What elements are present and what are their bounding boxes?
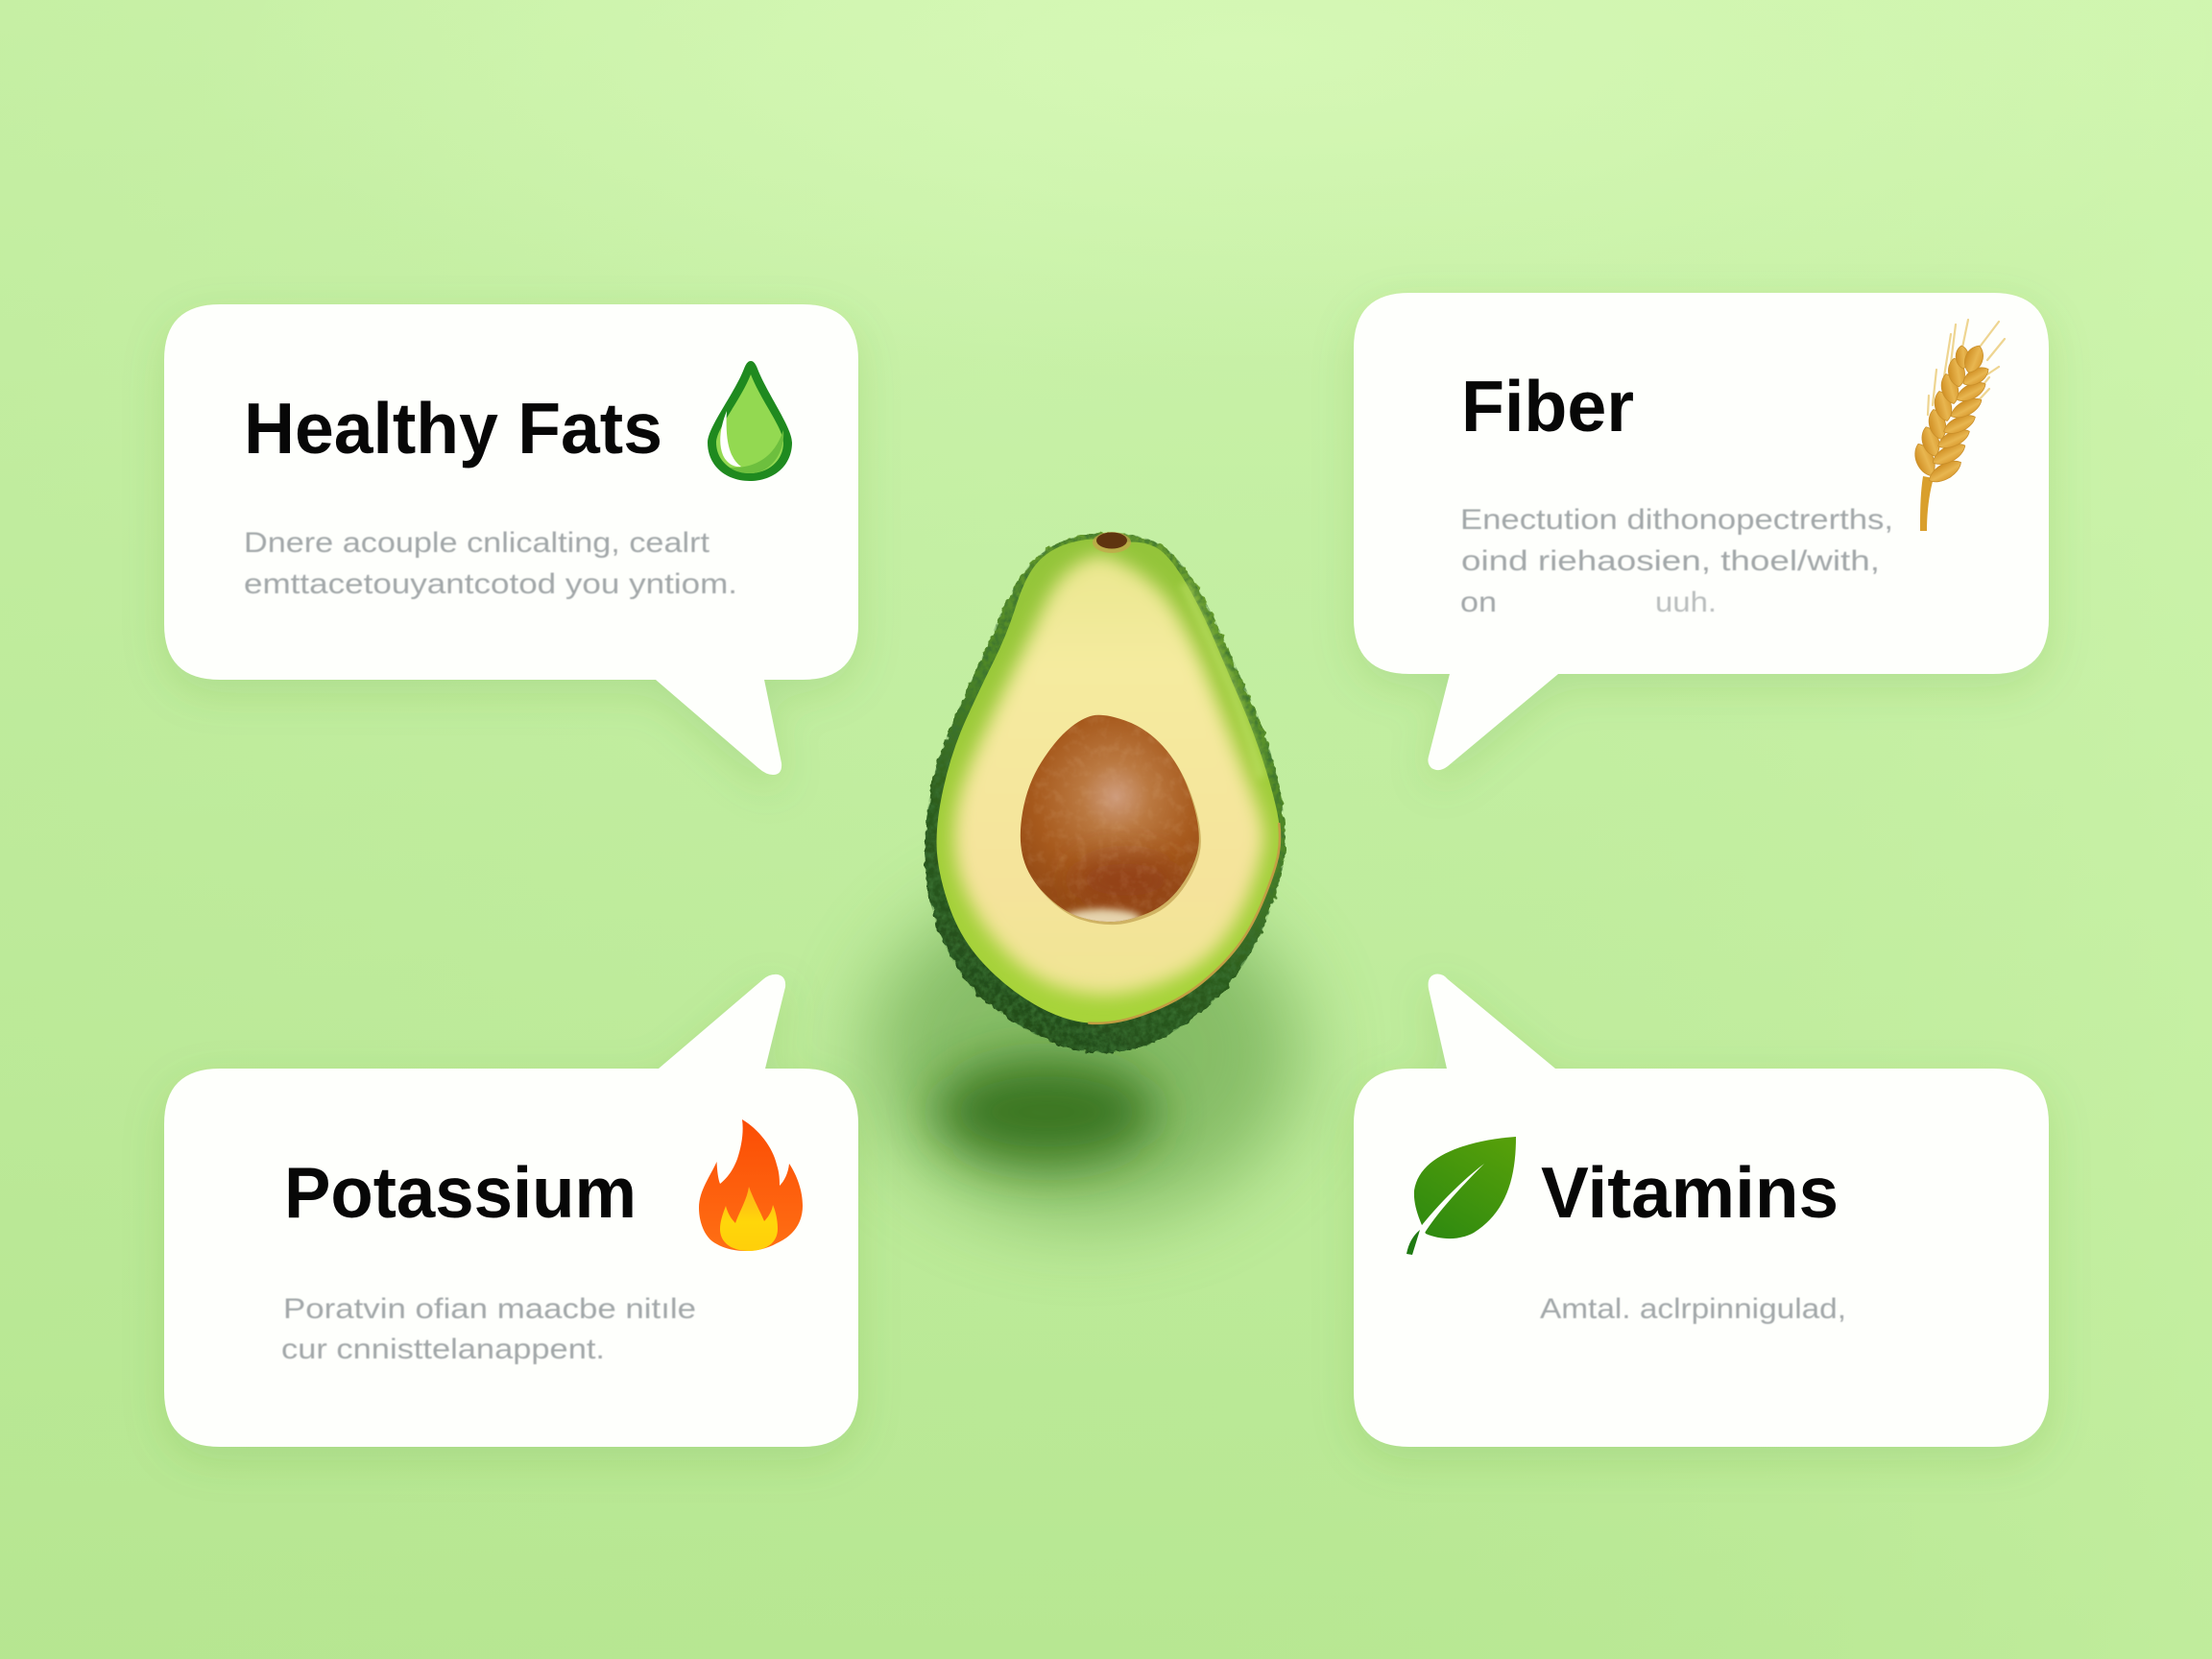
body text (1460, 504, 1893, 618)
body text: Dnere acouple cnlicalting, cealrt (244, 527, 710, 559)
avocado skin (925, 533, 1286, 1052)
panel: fiber (1354, 293, 2049, 770)
body text (281, 1293, 696, 1365)
speech bubble (1354, 974, 2049, 1447)
body text: uuh. (1655, 587, 1717, 618)
speech bubble (164, 304, 858, 775)
heading: Fiber (1461, 366, 1634, 446)
avocado cast shadow (869, 883, 1301, 1219)
avocado pale flesh (954, 556, 1263, 995)
body text: emttacetouyantcotod you yntiom. (244, 568, 737, 600)
heading: Healthy Fats (244, 388, 662, 469)
body text (244, 527, 737, 600)
body text: cur cnnisttelanappent. (281, 1334, 605, 1365)
body text: Amtal. aclrpinnigulad, (1540, 1293, 1846, 1325)
icon: oil drop (708, 361, 792, 481)
avocado flesh rim (937, 539, 1280, 1023)
icon: leaf (1407, 1137, 1516, 1255)
panel: vitamins (1354, 974, 2049, 1447)
avocado with cast shadow (869, 532, 1301, 1219)
panel: potassium (164, 974, 858, 1447)
panel: healthy fats (164, 304, 858, 775)
body text: oind riehaosien, thoel/with, (1461, 545, 1880, 577)
avocado seed (1016, 713, 1202, 928)
icon: wheat (1911, 320, 2005, 531)
heading: Potassium (284, 1152, 637, 1233)
body text: on (1460, 587, 1497, 618)
stem scar (1093, 532, 1131, 553)
body text: Enectution dithonopectrerths, (1460, 504, 1893, 536)
icon: flame (699, 1119, 803, 1251)
speech bubble (1354, 293, 2049, 770)
heading: Vitamins (1541, 1152, 1839, 1233)
skin texture (925, 533, 1286, 1052)
body text: Poratvin ofian maacbe nitıle (283, 1293, 696, 1325)
speech bubble (164, 974, 858, 1447)
